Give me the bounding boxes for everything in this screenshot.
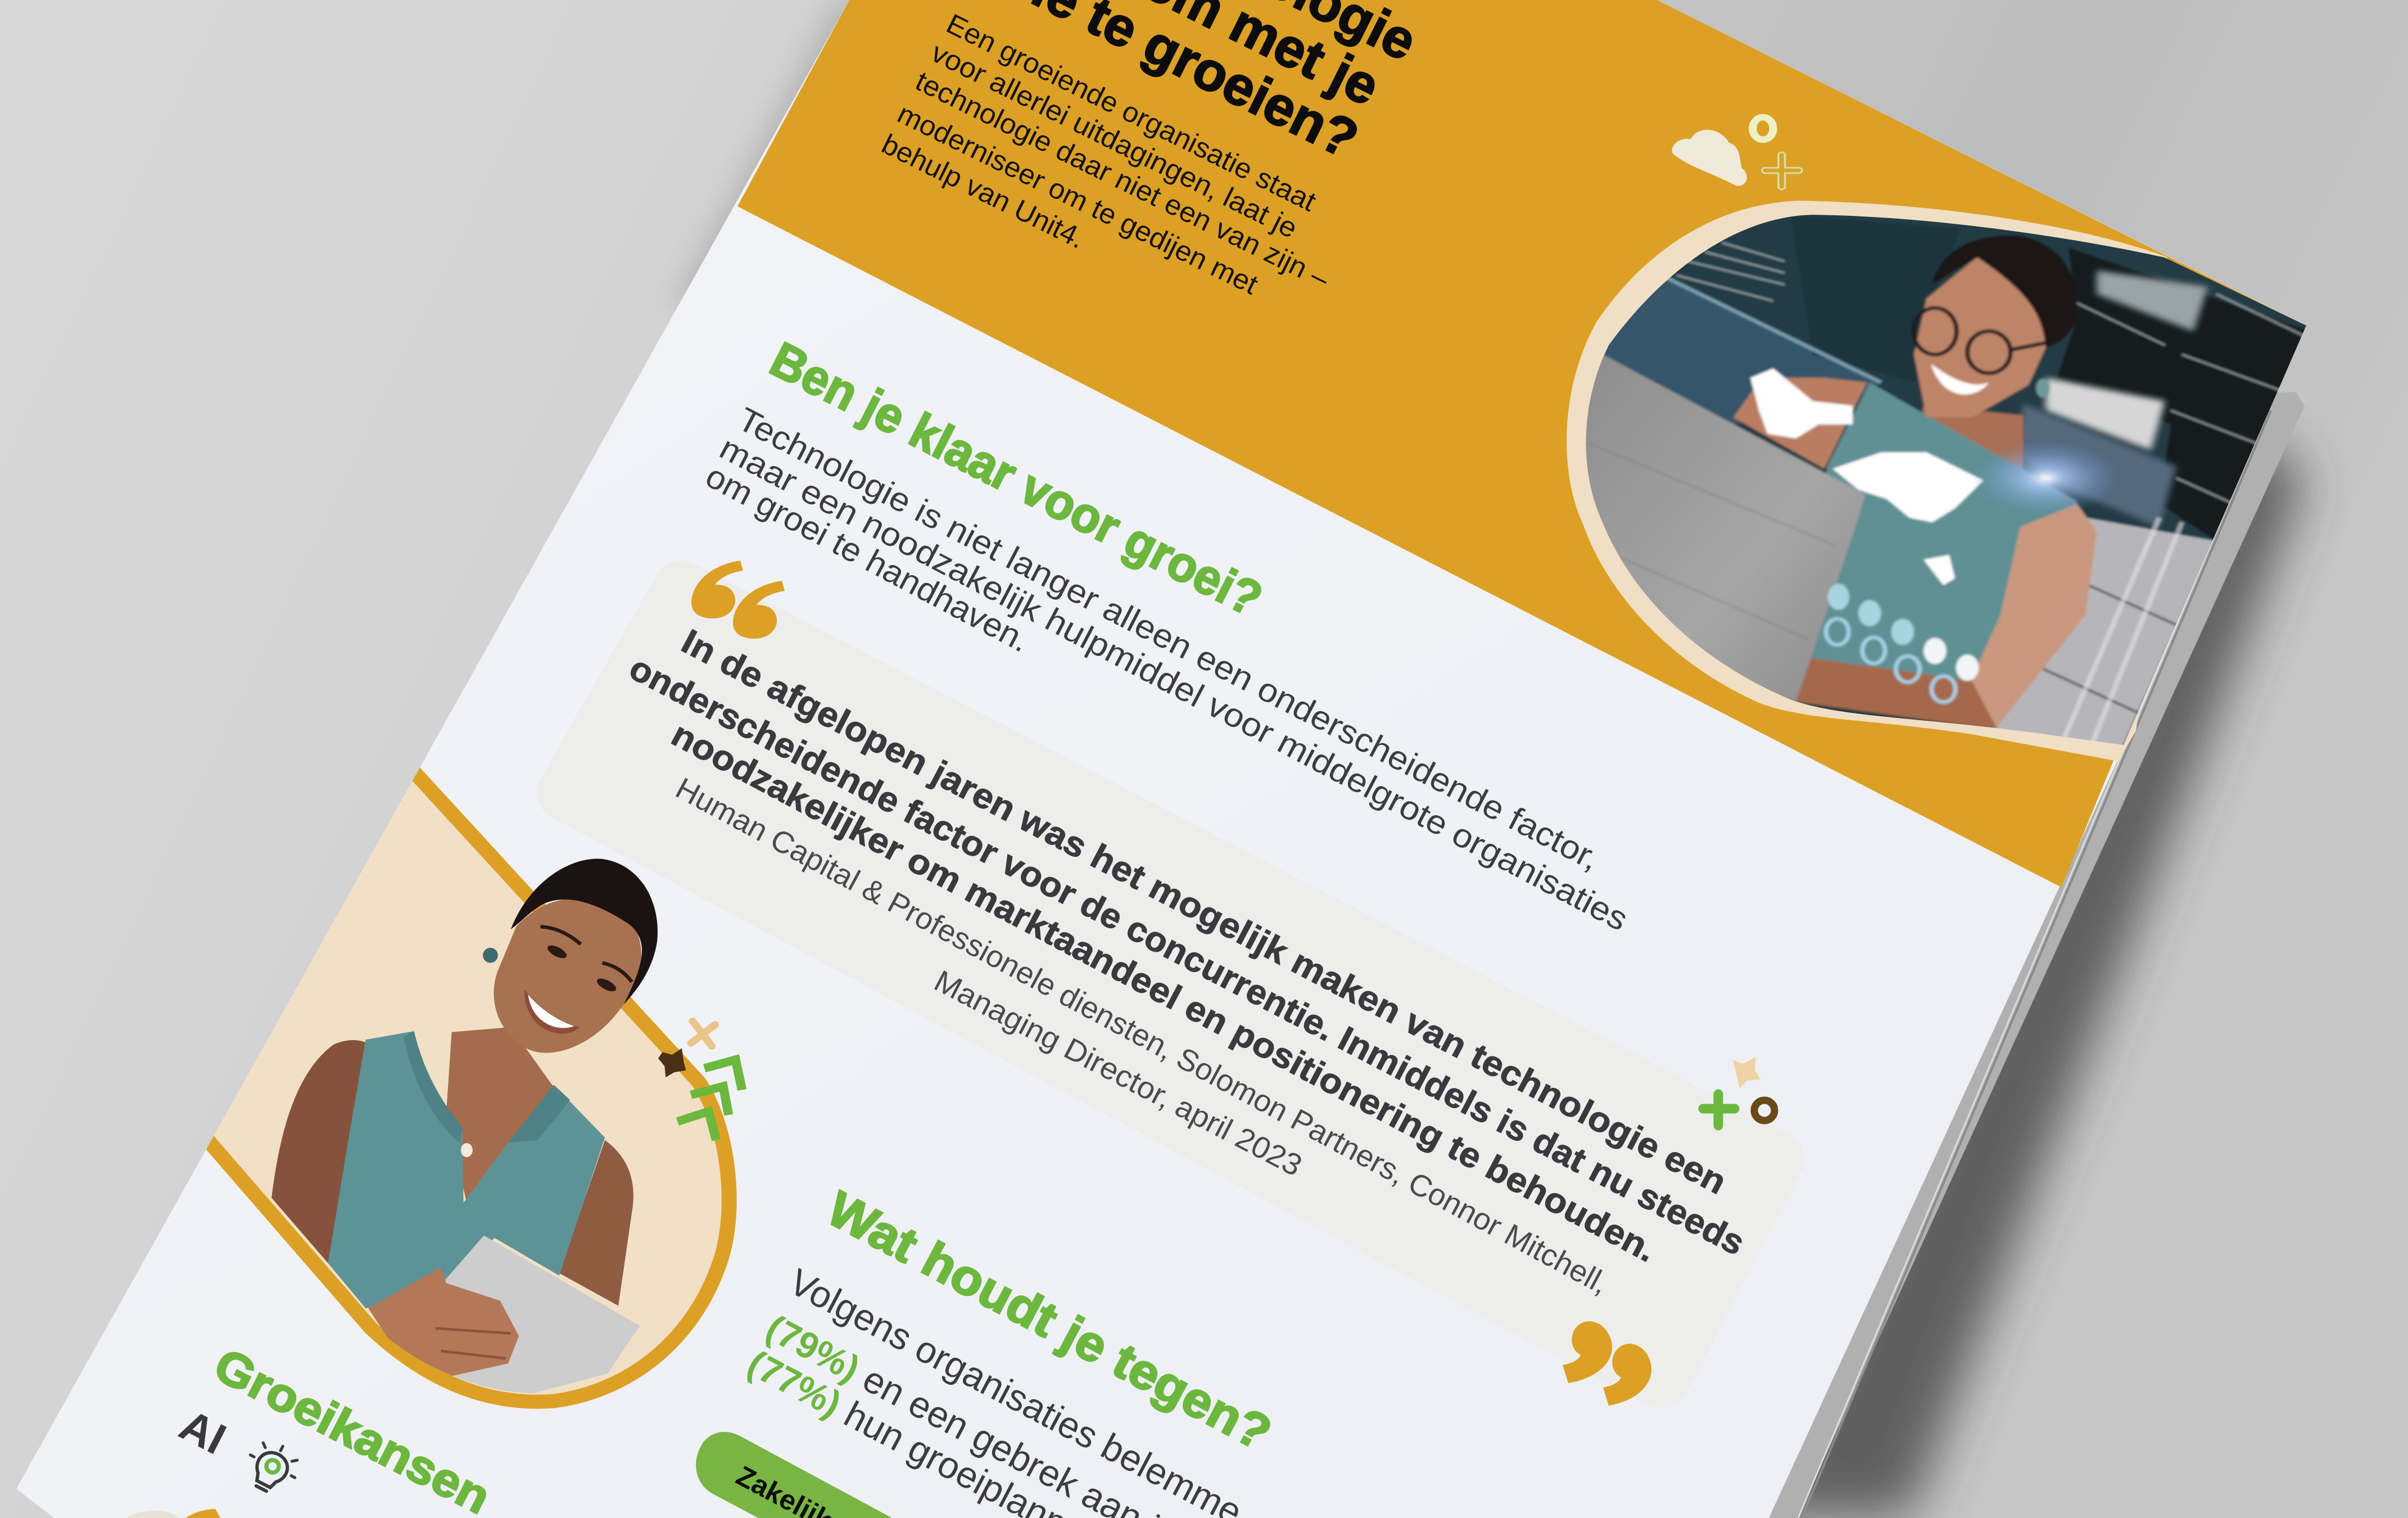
intro text block: technologie daar niet een van zijn – xyxy=(911,65,1334,295)
label: AI: AI xyxy=(172,1400,234,1464)
quote text: onderscheidende factor voor de concurrentie. Inmiddels is dat nu steeds xyxy=(623,648,1751,1263)
tablet xyxy=(425,1235,640,1394)
body text block: om groei te handhaven. xyxy=(700,457,1036,659)
shirt collar shading xyxy=(403,1031,570,1142)
button xyxy=(696,1432,892,1518)
pendant xyxy=(461,1143,473,1157)
body text block: Technologie is niet langer alleen een onderscheidende factor, xyxy=(732,400,1606,878)
quote attribution: Human Capital & Professionele diensten, Solomon Partners, Connor Mitchell, xyxy=(670,771,1614,1300)
right arm xyxy=(559,1140,633,1305)
intro text block: Een groeiende organisatie staat xyxy=(942,8,1321,218)
photo: woman working at laptop with data overlay xyxy=(1586,215,2306,745)
body text block: maar een noodzakelijk hulpmiddel voor middelgrote organisaties xyxy=(714,429,1634,938)
lips and smile xyxy=(524,990,580,1034)
hair xyxy=(511,859,658,1005)
icon: closing quote mark xyxy=(1563,1321,1651,1406)
page stack shadow xyxy=(1742,427,2305,1518)
panel: quote card xyxy=(565,589,1776,1380)
neck xyxy=(1915,406,2023,471)
icon: decorative star, plus and ring xyxy=(1703,1057,1775,1126)
photo frame: cream border xyxy=(1567,201,2192,761)
panel: teardrop portrait background xyxy=(199,766,729,1402)
left page edge shadow xyxy=(675,0,877,315)
page stack spine xyxy=(1765,392,2305,1518)
eyes and brows xyxy=(540,927,632,994)
intro text block: voor allerlei uitdagingen, laat je xyxy=(926,37,1302,245)
icon: opening quote mark xyxy=(691,561,785,639)
quote text: In de afgelopen jaren was het mogelijk maken van technologie een xyxy=(675,622,1732,1202)
hand xyxy=(368,1267,519,1376)
panel: yellow header band xyxy=(737,0,2299,887)
shoulder xyxy=(1733,378,1867,469)
icon: partial shapes at bottom edge xyxy=(127,1509,220,1518)
intro text block: moderniseer om te gedijen met xyxy=(893,98,1263,301)
intro text block: behulp van Unit4. xyxy=(877,128,1090,255)
intro text block xyxy=(877,8,1334,301)
face xyxy=(494,898,641,1053)
heading: Ben je klaar voor groei: Ben je klaar voor groei? xyxy=(762,331,1271,627)
quote text: noodzakelijker om marktaandeel en positionering te behouden. xyxy=(665,715,1663,1270)
icon: cloud, ring and plus on header xyxy=(1672,118,1799,187)
quote attribution: Managing Director, april 2023 xyxy=(929,964,1307,1183)
shirt xyxy=(328,1031,605,1308)
fingers xyxy=(436,1329,511,1358)
left arm xyxy=(271,1040,374,1263)
heading: Wat houdt je tegen: Wat houdt je tegen? xyxy=(818,1180,1280,1461)
chest xyxy=(446,1027,554,1208)
icon: plus, star and chevrons near portrait xyxy=(658,1021,742,1140)
icon: lightbulb with gear xyxy=(239,1435,305,1500)
heading: Groeikansen: Groeikansen xyxy=(206,1338,499,1518)
photo: smiling woman holding tablet xyxy=(271,859,658,1394)
earring xyxy=(483,948,498,963)
